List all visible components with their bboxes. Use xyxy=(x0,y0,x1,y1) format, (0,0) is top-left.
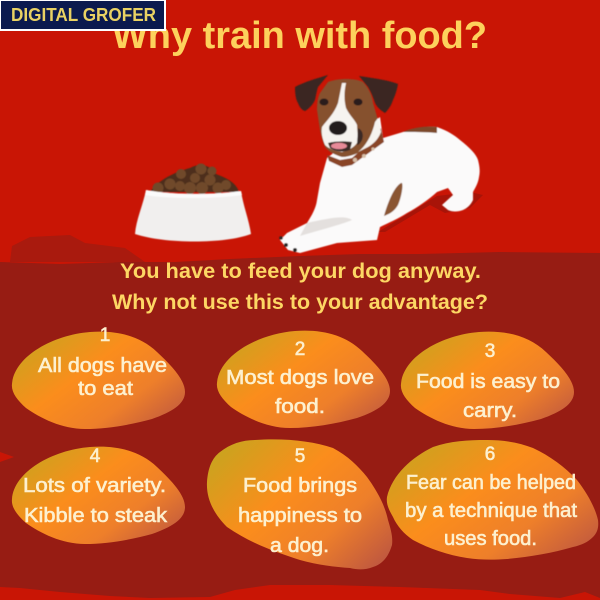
item 5 xyxy=(207,439,392,569)
tongue xyxy=(331,143,347,149)
dog body xyxy=(280,117,480,253)
item 1: 1 xyxy=(100,325,110,346)
logo: DIGITAL GROFER xyxy=(11,5,156,25)
background: dark red torn panel xyxy=(0,252,600,598)
background: dark blotch behind bowl xyxy=(10,235,145,262)
item 5: a dog. xyxy=(270,535,329,557)
kibble pile xyxy=(150,164,239,194)
subtitle xyxy=(112,259,488,314)
head xyxy=(317,79,381,157)
bowl rim shade xyxy=(145,190,242,198)
cheek dark patch xyxy=(357,128,363,145)
collar studs xyxy=(353,147,375,162)
item 2: Most dogs love xyxy=(226,367,374,389)
item 2: 2 xyxy=(295,339,305,360)
left ear xyxy=(295,75,328,111)
item 3: 3 xyxy=(485,341,495,362)
nose xyxy=(329,121,347,135)
item 5: 5 xyxy=(295,446,305,467)
item 6: by a technique that xyxy=(405,500,577,522)
item 4: Kibble to steak xyxy=(24,505,168,527)
mouth xyxy=(328,141,352,151)
item 4: 4 xyxy=(90,446,101,467)
item 2 xyxy=(217,331,390,428)
item 4: Lots of variety. xyxy=(23,475,166,497)
item 1: All dogs have xyxy=(38,355,167,377)
item 1: to eat xyxy=(78,378,133,400)
subtitle: Why not use this to your advantage? xyxy=(112,290,488,314)
right ear xyxy=(359,76,398,113)
item 4 xyxy=(12,446,185,544)
item 6 xyxy=(387,440,598,560)
paw toes xyxy=(279,236,297,252)
logo xyxy=(0,0,166,31)
eyes xyxy=(320,98,362,106)
side patch xyxy=(384,183,402,216)
item 1 xyxy=(12,325,185,429)
title: Why train with food? xyxy=(112,15,487,57)
head white markings xyxy=(322,83,358,152)
collar xyxy=(327,128,384,167)
item 3: Food is easy to xyxy=(416,371,560,393)
back patch xyxy=(403,127,437,133)
item 5: Food brings xyxy=(243,475,357,497)
item 3 xyxy=(401,332,574,429)
decorative left notch xyxy=(0,452,14,462)
subtitle: You have to feed your dog anyway. xyxy=(120,259,481,283)
shadow under dog xyxy=(378,192,483,232)
item 3: carry. xyxy=(463,400,517,422)
item 2: food. xyxy=(275,396,325,418)
item 6: Fear can be helped xyxy=(406,472,576,494)
food bowl xyxy=(135,164,251,242)
dog xyxy=(279,75,480,253)
item 5: happiness to xyxy=(238,505,362,527)
item 6: uses food. xyxy=(444,528,537,550)
bowl body xyxy=(135,190,251,242)
body shading xyxy=(300,217,352,236)
item 6: 6 xyxy=(485,444,495,465)
neck white xyxy=(358,118,381,152)
